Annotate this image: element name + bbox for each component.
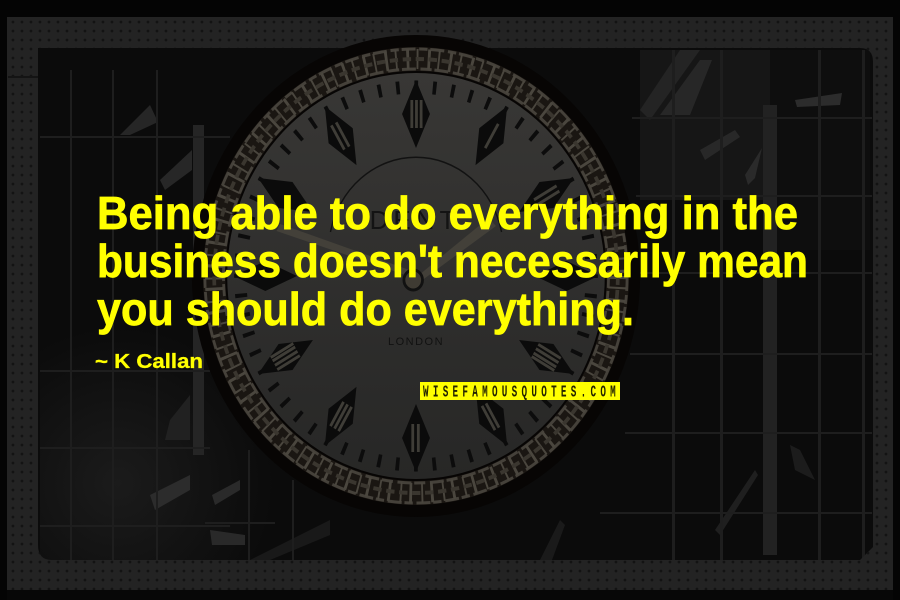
hour markers	[234, 80, 598, 472]
dial brand text: DENT	[370, 205, 460, 235]
dial London text: LONDON	[388, 336, 444, 348]
quote	[97, 187, 808, 335]
center pivot	[404, 270, 423, 290]
ornamental ring	[205, 49, 627, 503]
inner dial arc	[330, 157, 502, 232]
clock rim	[192, 35, 640, 517]
clock face	[227, 73, 605, 479]
watermark badge: WISEFAMOUSQUOTES.COM	[423, 384, 620, 403]
quote: Being able to do everything in the	[97, 187, 798, 239]
hour marker numerals	[270, 100, 561, 452]
quote: business doesn't necessarily mean	[97, 235, 808, 287]
minute ticks	[240, 87, 592, 465]
author: ~ K Callan	[95, 351, 203, 373]
clock hands	[276, 218, 496, 282]
quote: you should do everything.	[97, 283, 634, 335]
window bars	[40, 50, 872, 560]
clock	[192, 35, 640, 517]
